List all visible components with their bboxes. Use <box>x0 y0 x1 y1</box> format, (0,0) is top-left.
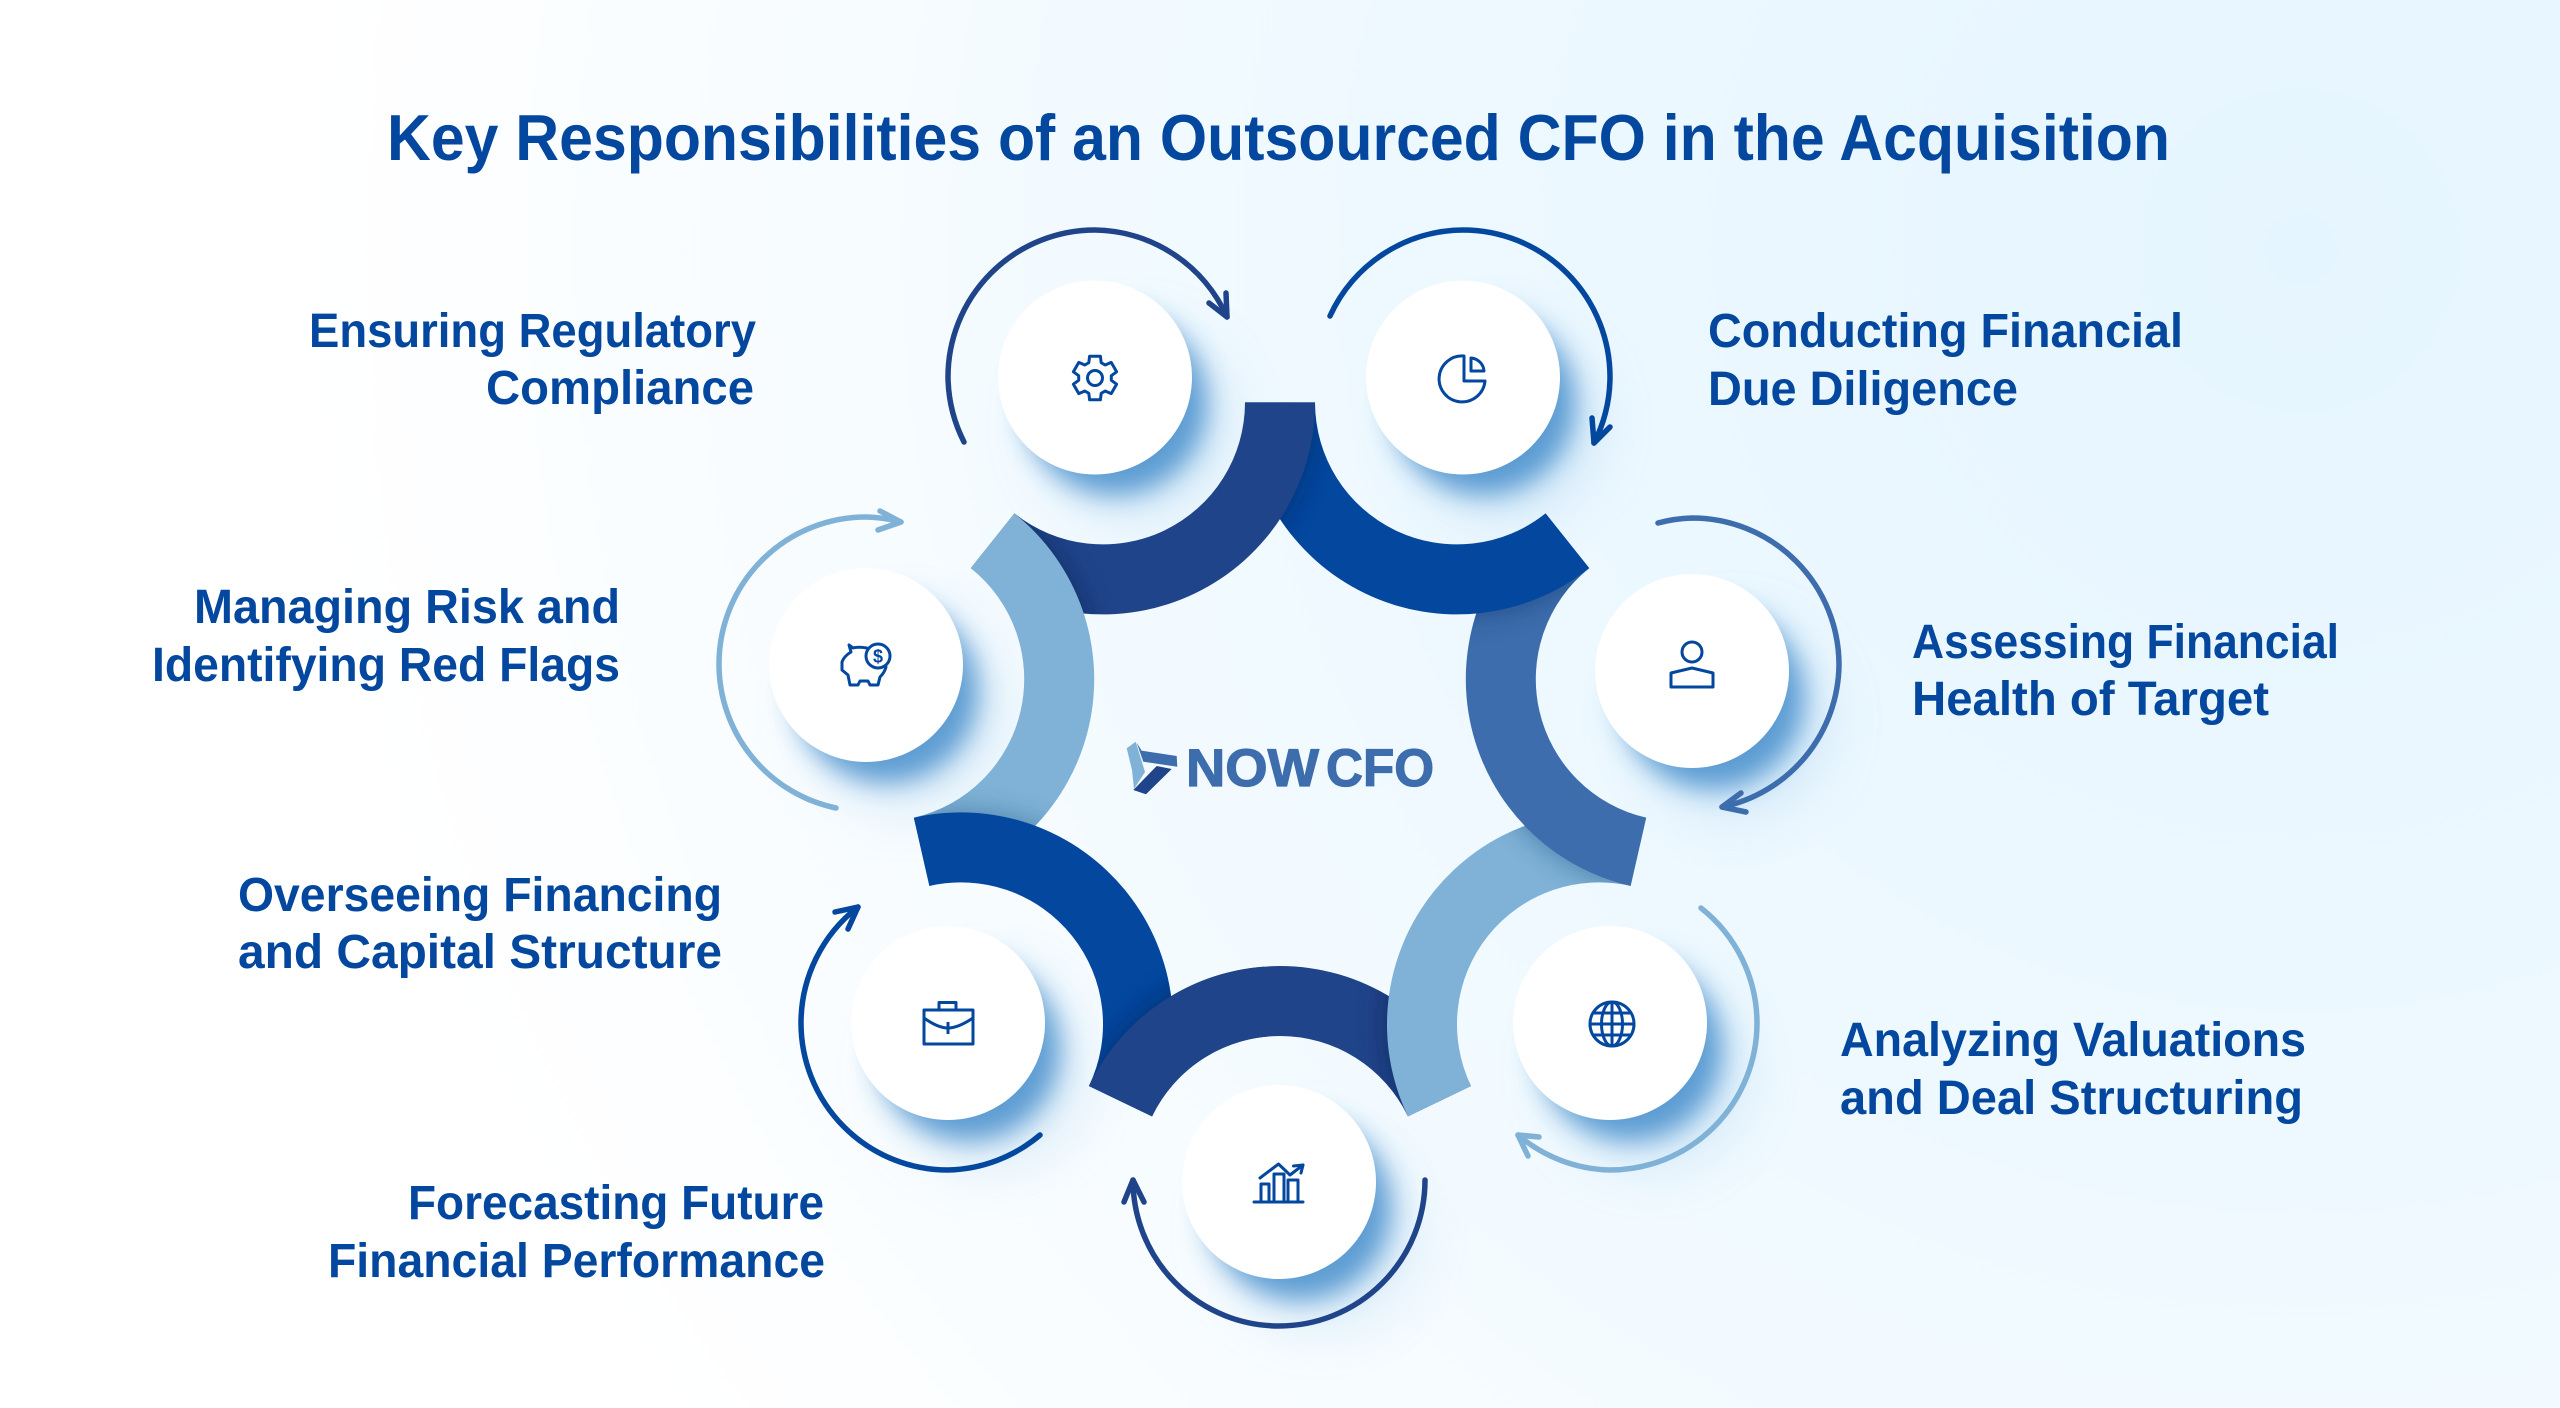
icon: piggy bank with coin <box>842 644 890 685</box>
label: Assessing Financial Health of Target <box>1912 616 2339 726</box>
arrow: due diligence <box>1330 230 1610 443</box>
center logo <box>1127 739 1434 798</box>
band: due diligence <box>1209 299 1589 700</box>
white circle <box>998 280 1192 474</box>
logo wordmark <box>1186 739 1434 798</box>
icon: person <box>1671 642 1713 687</box>
icon: piggy bank with coin: $ <box>873 646 883 666</box>
label: Assessing Financial Health of Target: Assessing Financial <box>1912 616 2339 669</box>
label: Analyzing Valuations and Deal Structuring: and Deal Structuring <box>1840 1072 2303 1125</box>
band: valuations <box>1316 776 1718 1116</box>
title: Key Responsibilities of an Outsourced CFO in the Acquisition <box>387 101 2170 174</box>
icon: briefcase <box>924 1002 973 1044</box>
node: valuations <box>1513 908 1757 1170</box>
icon: bar chart with trend arrow <box>1254 1164 1303 1202</box>
node: regulatory compliance <box>948 230 1227 474</box>
node: financial health <box>1595 518 1839 812</box>
label: Managing Risk and Identifying Red Flags: Identifying Red Flags <box>152 639 620 692</box>
icon: pie chart <box>1439 356 1485 402</box>
label: Conducting Financial Due Diligence: Conducting Financial <box>1708 305 2183 358</box>
logo wordmark: NOW <box>1186 739 1319 798</box>
node: risk <box>719 511 963 808</box>
label: Analyzing Valuations and Deal Structuring <box>1840 1014 2306 1125</box>
ring: seven interlocking arc bands <box>800 299 1718 1235</box>
white circle <box>851 926 1045 1120</box>
white circle <box>1366 280 1560 474</box>
label: Conducting Financial Due Diligence: Due Diligence <box>1708 363 2018 416</box>
arrow: forecasting <box>1124 1180 1425 1326</box>
label: Assessing Financial Health of Target: Health of Target <box>1912 673 2269 726</box>
label: Conducting Financial Due Diligence <box>1708 305 2183 416</box>
label: Overseeing Financing and Capital Structure: and Capital Structure <box>238 926 722 979</box>
label: Ensuring Regulatory Compliance: Compliance <box>486 362 754 415</box>
arrow: risk <box>719 511 901 808</box>
band: risk <box>800 513 1180 915</box>
node: due diligence <box>1330 230 1610 474</box>
label: Overseeing Financing and Capital Structure <box>238 869 722 979</box>
label: Ensuring Regulatory Compliance: Ensuring Regulatory <box>309 305 756 358</box>
white circle <box>769 568 963 762</box>
band: forecasting, left end overlapping financing <box>1089 921 1296 1147</box>
label: Analyzing Valuations and Deal Structuring: Analyzing Valuations <box>1840 1014 2306 1067</box>
logo wordmark: CFO <box>1326 739 1434 798</box>
arrow: compliance <box>948 230 1227 442</box>
label: Overseeing Financing and Capital Structure: Overseeing Financing <box>238 869 722 922</box>
arrow: valuations <box>1518 908 1757 1170</box>
white circle <box>1182 1085 1376 1279</box>
white circle <box>1595 574 1789 768</box>
band: compliance <box>971 402 1315 614</box>
white circle <box>1513 926 1707 1120</box>
band: forecasting <box>1089 895 1491 1235</box>
node: financing <box>801 907 1045 1170</box>
label: Managing Risk and Identifying Red Flags: Managing Risk and <box>194 581 620 634</box>
band: financing <box>914 771 1197 1153</box>
label: Managing Risk and Identifying Red Flags <box>152 581 620 692</box>
logo mark <box>1127 742 1177 794</box>
arrow: financing <box>801 907 1040 1170</box>
arrow: financial health <box>1658 518 1839 812</box>
band: financial health <box>1424 503 1707 886</box>
icon: gear <box>1073 356 1117 400</box>
label: Forecasting Future Financial Performance: Forecasting Future <box>408 1177 824 1230</box>
label: Forecasting Future Financial Performance: Financial Performance <box>328 1235 825 1288</box>
label: Ensuring Regulatory Compliance <box>309 305 756 415</box>
node: forecasting <box>1124 1085 1425 1326</box>
icon: globe <box>1590 1002 1634 1046</box>
label: Forecasting Future Financial Performance <box>328 1177 825 1288</box>
circle drop shadows <box>794 311 1827 1325</box>
